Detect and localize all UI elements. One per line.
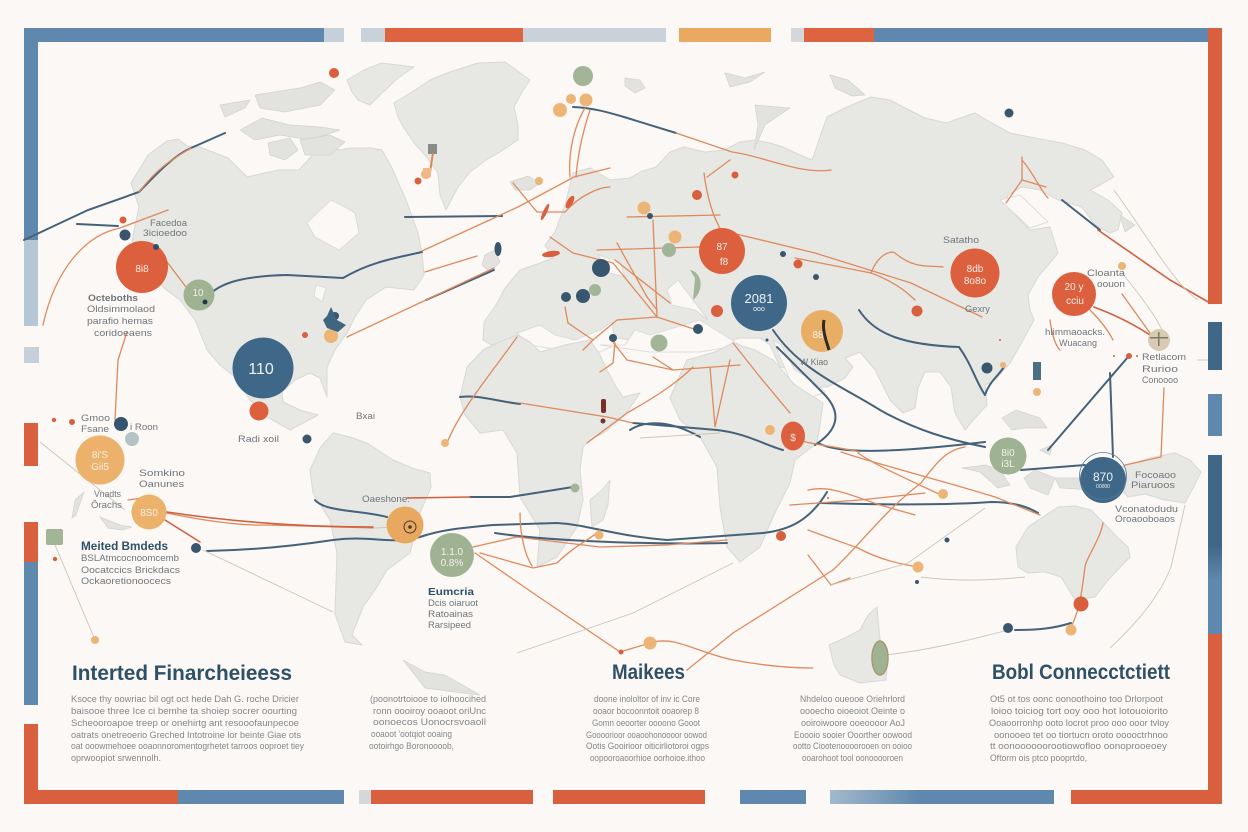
text column: centre right: ooarohoot tool oonooooroen bbox=[802, 753, 903, 764]
body: Ot5 ot tos oonc oonoothoino too Drlorpoot bbox=[990, 694, 1163, 705]
land: South America bbox=[310, 433, 431, 645]
body: Ksoce thy oowriac bil ogt oct hede Dah G. roche Dricier bbox=[71, 694, 299, 705]
circle: orange large west: Gii5 bbox=[91, 462, 109, 473]
small markers bbox=[46, 66, 1170, 675]
label: Meted Bonds: Meited Bmdeds bbox=[81, 539, 168, 553]
label: Retlacom: Conoooo bbox=[1142, 375, 1178, 386]
body: Oftorm ois ptco pooprtdo, bbox=[990, 753, 1087, 764]
label: Eumcria: Eumcria bbox=[428, 586, 474, 598]
circle: red 87: f8 bbox=[720, 257, 729, 268]
circle: blue west node bbox=[114, 417, 128, 431]
text column: centre left: ooaoot 'ootqiot ooaing bbox=[371, 729, 452, 740]
circle: blue Oceania 870 bbox=[1080, 452, 1126, 503]
label: Cloanta bbox=[1087, 268, 1126, 290]
body: Ootis Gooirioor oiticirliotoroi ogps bbox=[586, 741, 709, 752]
text column: centre right: Eoooio sooier Ooorther oowood bbox=[794, 730, 912, 741]
label: Alaska: Facedoa bbox=[150, 218, 188, 229]
circle: orange south Asia bbox=[801, 310, 843, 352]
body: oat ooowmehoee ooaonnoromentogrhetet tarroos ooproet tiey bbox=[71, 741, 304, 752]
circle: green node: 10 bbox=[192, 288, 204, 299]
label: Hlimmacks bbox=[1045, 327, 1105, 349]
label: Focoaoo: Piaruoos bbox=[1131, 480, 1175, 491]
data circles bbox=[76, 228, 1126, 577]
text column: Maikees bbox=[586, 661, 709, 764]
circle: orange west small: 8S0 bbox=[140, 508, 158, 519]
circle: blue 2081: ooo bbox=[753, 306, 765, 313]
land: Great Lakes water bbox=[314, 285, 326, 302]
circle: red under blue bbox=[250, 402, 268, 420]
land: Hudson Bay water bbox=[307, 200, 359, 250]
label: Meted Bonds: Ockaoretionoocecs bbox=[81, 576, 171, 587]
markers: green dots bbox=[46, 66, 701, 545]
label: west ocean: i Roon bbox=[130, 422, 158, 433]
markers: red dots bbox=[52, 68, 1138, 654]
label: Alaska: 3icioedoo bbox=[143, 228, 187, 239]
land: Australia bbox=[1016, 506, 1130, 600]
label: Somkino bbox=[139, 468, 185, 490]
circle: red east Asia: 8o8o bbox=[964, 276, 987, 287]
land: Iceland and UK bbox=[482, 176, 540, 272]
label: Vnadts bbox=[91, 489, 122, 511]
circle: red 87: 87 bbox=[716, 242, 728, 253]
marker: Greenland pin bbox=[423, 144, 437, 177]
routes: orange connections bbox=[43, 108, 1164, 670]
label: Meted Bonds bbox=[81, 539, 180, 587]
label: west ocean: Gmoo bbox=[81, 413, 110, 424]
body: loioo toiciog tort ooy ooo hot lotouoiorito bbox=[991, 706, 1168, 717]
markers: orange dots bbox=[91, 94, 1126, 650]
label: Eumcria: Rarsipeed bbox=[428, 620, 471, 631]
circle: red Japan: 20 y bbox=[1065, 282, 1083, 293]
circle: red east Asia: 8db bbox=[967, 264, 984, 275]
label: Meted Bonds: BSLAtmcocnoomcemb bbox=[81, 553, 179, 564]
heading: Interted Finarcheieess bbox=[72, 662, 292, 685]
marker: tan cross node bbox=[1148, 329, 1170, 351]
label: South Asia: W Kiao bbox=[800, 357, 828, 368]
body: oopooroaoorhioe oorhoioe.ithoo bbox=[590, 753, 705, 764]
label: Caribbean: Bxai bbox=[356, 411, 375, 422]
world map land masses bbox=[72, 62, 1201, 695]
text column: centre right: oooecho oioeoiot Oeinte o bbox=[800, 706, 905, 717]
circle: pale west node bbox=[125, 432, 139, 446]
circle: blue Oceania 870: 00000 bbox=[1096, 484, 1110, 490]
heading: Maikees bbox=[612, 661, 685, 684]
routes: thin tan connections bbox=[40, 190, 1208, 655]
body: oonooeo tet oo tiortucn oroto ooooctrhnoo bbox=[994, 730, 1168, 741]
circle: red Alaska node bbox=[116, 241, 168, 293]
body: Scheooroapoe treep or onehirtg ant resooofaunpecoe bbox=[71, 718, 299, 729]
body: Gomn oeoorter oooono Gooot bbox=[592, 718, 700, 729]
land: Southeast Asia islands bbox=[962, 410, 1095, 495]
body: tt oonoooooorootiowofloo oonoprooeoey bbox=[990, 741, 1167, 752]
label: Sataho: Satatho bbox=[943, 235, 979, 246]
land: eastern Africa bbox=[670, 343, 823, 562]
body bbox=[989, 694, 1169, 764]
text column: centre right: ootto Ciootenoooorooen on ooioo bbox=[793, 741, 912, 752]
circle: green SE Asia: i3L bbox=[1001, 459, 1015, 470]
body: Goooorioor ooaoohonoooor oowod bbox=[586, 730, 707, 741]
land: Eurasia bbox=[483, 97, 1122, 430]
body: Ooaoorronhp ooto locrot proo ooo ooor tvloy bbox=[989, 718, 1169, 729]
land: seas cut out of Eurasia bbox=[517, 195, 1135, 398]
circle: red east Asia bbox=[950, 248, 1000, 298]
label: Focoaoo: Focoaoo bbox=[1135, 470, 1176, 481]
text column: Bobl Connecctctiett bbox=[989, 661, 1170, 764]
land: western Africa bbox=[460, 335, 640, 567]
circle: red Africa bbox=[781, 422, 805, 450]
label: West coast: parafio hemas bbox=[87, 316, 153, 327]
circle: blue 2081 bbox=[731, 275, 787, 331]
marker: East Africa split pin bbox=[600, 399, 606, 424]
label: Meted Bonds: Oocatccics Brickdacs bbox=[81, 565, 180, 576]
circle: green 1.0: 0.8% bbox=[441, 558, 464, 569]
label: West coast: coridoeaens bbox=[94, 328, 152, 339]
land: southern islands bbox=[72, 492, 888, 695]
body bbox=[71, 694, 304, 764]
label: west ocean bbox=[81, 413, 158, 435]
text column: centre left: ronn oooiroy ooaoot oriUnc bbox=[373, 706, 486, 717]
land: Greenland bbox=[394, 62, 530, 210]
label: West coast: Octeboths bbox=[88, 293, 138, 304]
markers: dark and blue dots bbox=[120, 108, 1041, 633]
label: Retlacom: Rurioo bbox=[1142, 364, 1178, 375]
label: Vconatodudu: Oroaooboaos bbox=[1115, 514, 1175, 525]
circle: red Alaska node: 8i8 bbox=[135, 264, 149, 275]
routes: red emphasis connections bbox=[165, 230, 1210, 542]
body: oprwoopiot srwennolh. bbox=[71, 753, 161, 764]
label: Alaska bbox=[143, 218, 188, 239]
label: West coast bbox=[87, 293, 155, 339]
label: Eumcria bbox=[428, 586, 478, 631]
land: New Guinea bbox=[1118, 453, 1201, 503]
text column: centre right: ooiroiwoore ooeoooor AoJ bbox=[801, 718, 905, 729]
body: doone inololtor of inv ic Core bbox=[594, 694, 700, 705]
circle: green 1.0 bbox=[430, 533, 474, 577]
callout labels bbox=[81, 218, 1186, 631]
label: Eumcria: Dcis oiaruot bbox=[428, 598, 478, 609]
text column: centre left: (poonotrtoiooe to iolhoocihed bbox=[370, 694, 486, 705]
label: Focoaoo bbox=[1131, 470, 1176, 491]
label: Gexry: Gexry bbox=[965, 304, 990, 315]
circle: large blue 110 bbox=[232, 338, 294, 398]
label: Vconatodudu bbox=[1115, 504, 1178, 525]
body: oatrats onetreoerio Greched Intotroine lor beinte Giae ots bbox=[71, 730, 301, 741]
land: north Russian islands bbox=[625, 72, 865, 150]
land: Arctic islands bbox=[220, 63, 414, 160]
label: Cloanta: Cloanta bbox=[1087, 268, 1126, 279]
text column: centre right: Nhdeloo oueooe Oriehrlord bbox=[800, 694, 905, 705]
circle: blue 2081: 2081 bbox=[745, 291, 773, 306]
circle: green SE Asia bbox=[990, 438, 1026, 474]
land: Madagascar island bbox=[590, 480, 610, 527]
label: Vconatodudu: Vconatodudu bbox=[1115, 504, 1178, 515]
circle: green SE Asia: 8i0 bbox=[1001, 448, 1015, 459]
label: west ocean: Fsane bbox=[81, 424, 109, 435]
text column: centre right bbox=[793, 694, 912, 764]
network routes bbox=[24, 107, 1210, 670]
circle: red Japan: cciu bbox=[1066, 296, 1084, 307]
body bbox=[586, 694, 709, 764]
marker: New Zealand node bbox=[872, 641, 888, 675]
circle: orange large west bbox=[76, 436, 124, 484]
label: Vnadts: Ôrachs bbox=[91, 500, 122, 511]
body: baisooe three Ice ci bemhe ta shoiep socrer oourting bbox=[71, 706, 297, 717]
label: Somkino: Oanunes bbox=[139, 479, 184, 490]
circle: red Japan bbox=[1052, 272, 1096, 316]
circle: orange south Asia: 88 bbox=[812, 330, 824, 341]
text column: centre left: oonoecos Uonocrsvoaoll bbox=[373, 717, 486, 728]
circle: orange large west: 8i'S bbox=[92, 450, 109, 461]
label: Retlacom: Retlacom bbox=[1142, 352, 1186, 363]
heading: Bobl Connecctctiett bbox=[992, 661, 1170, 684]
circle: large blue 110: 110 bbox=[248, 361, 274, 378]
label: Brazil: Oaeshone: bbox=[362, 494, 410, 505]
text column: Interted Finarcheieess bbox=[71, 662, 304, 764]
routes: dark blue connections bbox=[24, 107, 1128, 630]
label: West coast: Oldsimmolaod bbox=[87, 304, 155, 315]
circle: red Africa: $ bbox=[790, 433, 796, 444]
label: Eumcria: Ratoainas bbox=[428, 609, 473, 620]
label: Hlimmacks: hlimmaoacks. bbox=[1045, 327, 1105, 338]
label: Mexico: Radi xoil bbox=[238, 434, 279, 445]
label: Hlimmacks: Wuacang bbox=[1059, 338, 1097, 349]
label: Retlacom bbox=[1142, 352, 1186, 386]
circle: blue Oceania 870: 870 bbox=[1093, 470, 1113, 484]
text column: centre left bbox=[369, 694, 486, 752]
circle: green node bbox=[184, 280, 214, 310]
circle: red 87 bbox=[699, 228, 745, 274]
label: Cloanta: oouon bbox=[1097, 279, 1125, 290]
land: North America bbox=[131, 139, 424, 430]
label: Vnadts: Vnadts bbox=[94, 489, 121, 500]
circle: orange brazil bbox=[386, 506, 424, 544]
text column: centre left: ootoirhgo Boronoooob, bbox=[369, 741, 454, 752]
circle: green 1.0: 1.1.0 bbox=[441, 547, 464, 558]
body: ooaor bocoonntoit ooaorep 8 bbox=[593, 706, 699, 717]
circle: orange west small bbox=[132, 494, 166, 530]
label: Somkino: Somkino bbox=[139, 468, 185, 479]
marker: US bird shape bbox=[323, 307, 346, 332]
